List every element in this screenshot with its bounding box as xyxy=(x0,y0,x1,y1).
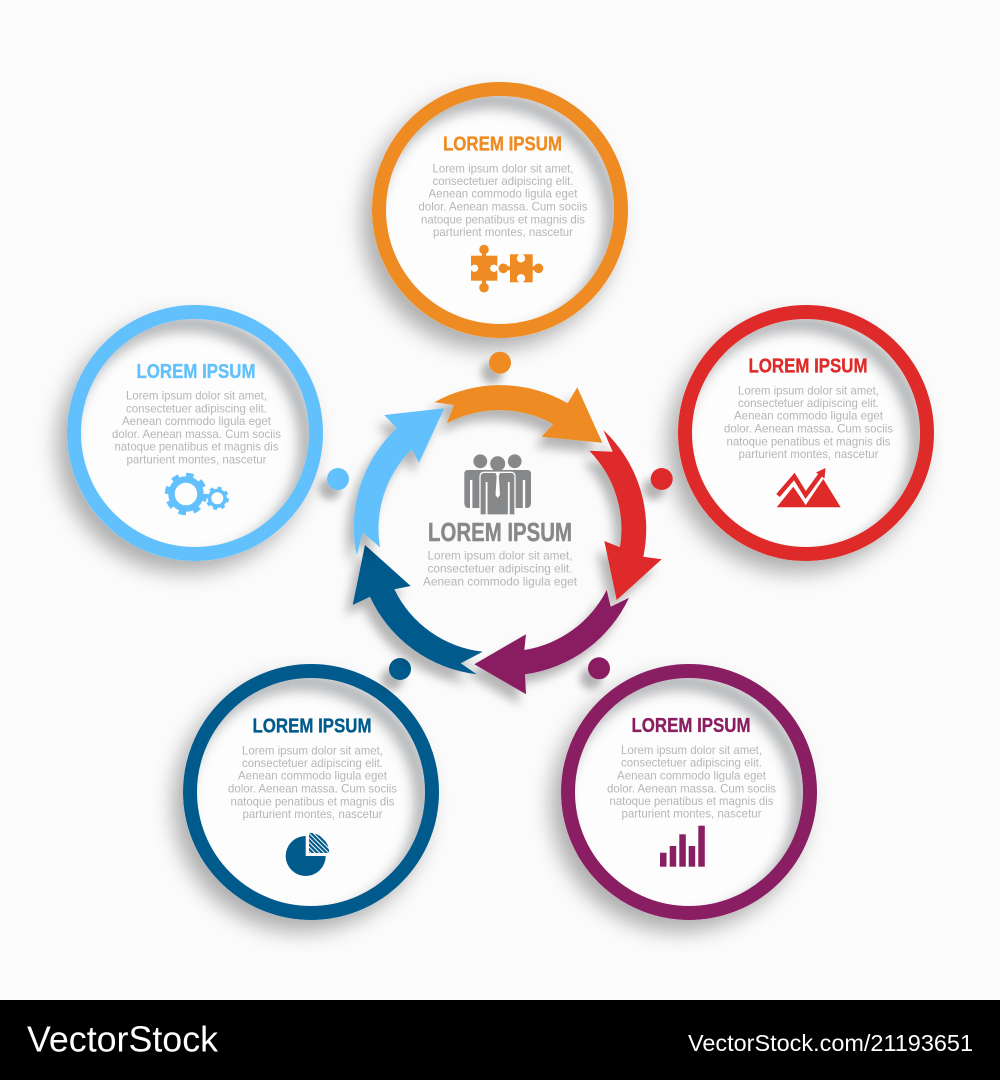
connector dot: dark blue xyxy=(389,658,411,680)
orange body text: Aenean commodo ligula eget xyxy=(428,187,578,201)
red body text xyxy=(724,383,893,461)
connector dot: light blue xyxy=(327,468,349,490)
connector dot: red xyxy=(651,468,673,490)
arrow: orange xyxy=(434,385,602,443)
dark blue body text: consectetuer adipiscing elit. xyxy=(242,756,383,770)
light blue body text xyxy=(112,389,281,466)
red body text: dolor. Aenean massa. Cum sociis xyxy=(724,422,893,436)
purple body text: dolor. Aenean massa. Cum sociis xyxy=(607,781,776,795)
light blue body text: parturient montes, nascetur xyxy=(126,452,266,466)
arrow: red xyxy=(589,430,662,600)
red body text: Lorem ipsum dolor sit amet, xyxy=(738,383,879,397)
orange body text: natoque penatibus et magnis dis xyxy=(421,212,585,226)
arrow: light blue xyxy=(354,408,444,555)
footer logo text: VectorStock xyxy=(27,1018,219,1060)
light blue body text: dolor. Aenean massa. Cum sociis xyxy=(112,427,281,441)
red ring xyxy=(676,305,934,565)
purple ring xyxy=(559,664,817,924)
panel: dark blue circle xyxy=(181,664,439,924)
purple body text: Lorem ipsum dolor sit amet, xyxy=(621,743,762,757)
center body text: consectetuer adipiscing elit. xyxy=(428,562,572,576)
center body text xyxy=(423,548,578,589)
dark blue body text: Lorem ipsum dolor sit amet, xyxy=(242,743,383,757)
orange body text: parturient montes, nascetur xyxy=(433,225,573,239)
light blue body text: Lorem ipsum dolor sit amet, xyxy=(126,389,267,403)
footer bar xyxy=(0,1000,1000,1080)
icon: puzzle pieces xyxy=(470,245,543,293)
connector dot: purple xyxy=(588,657,610,679)
light blue heading: LOREM IPSUM xyxy=(136,361,256,383)
panel: light blue circle xyxy=(65,305,323,565)
orange body text: dolor. Aenean massa. Cum sociis xyxy=(418,200,588,214)
orange ring xyxy=(370,82,628,342)
light blue body text: consectetuer adipiscing elit. xyxy=(126,401,267,415)
dark blue heading: LOREM IPSUM xyxy=(252,716,372,738)
orange body text: Lorem ipsum dolor sit amet, xyxy=(432,161,574,175)
purple body text: consectetuer adipiscing elit. xyxy=(621,756,762,770)
dark blue body text xyxy=(228,743,397,821)
footer image id: VectorStock.com/21193651 xyxy=(688,1030,973,1056)
center heading: LOREM IPSUM xyxy=(428,519,572,547)
dark blue body text: Aenean commodo ligula eget xyxy=(238,769,388,783)
light blue body text: natoque penatibus et magnis dis xyxy=(114,440,278,454)
light blue body text: Aenean commodo ligula eget xyxy=(122,414,272,428)
orange heading: LOREM IPSUM xyxy=(443,134,562,156)
purple body text xyxy=(607,743,776,821)
red body text: Aenean commodo ligula eget xyxy=(734,409,884,423)
red body text: natoque penatibus et magnis dis xyxy=(726,434,890,448)
panel: red circle xyxy=(676,305,934,565)
red body text: consectetuer adipiscing elit. xyxy=(738,396,879,410)
purple body text: natoque penatibus et magnis dis xyxy=(610,794,774,808)
arrow: dark blue xyxy=(353,545,483,674)
icon: bar chart xyxy=(660,826,705,867)
dark blue body text: parturient montes, nascetur xyxy=(242,807,382,821)
light blue ring xyxy=(65,305,323,565)
purple body text: parturient montes, nascetur xyxy=(622,807,762,821)
icon: gears xyxy=(167,475,228,513)
center body text: Lorem ipsum dolor sit amet, xyxy=(428,548,572,562)
dark blue ring xyxy=(181,664,439,924)
center block xyxy=(423,454,578,589)
dark blue body text: dolor. Aenean massa. Cum sociis xyxy=(228,782,397,796)
red heading: LOREM IPSUM xyxy=(748,356,868,378)
orange body text: consectetuer adipiscing elit. xyxy=(432,174,574,188)
purple heading: LOREM IPSUM xyxy=(632,715,750,737)
center body text: Aenean commodo ligula eget xyxy=(423,575,578,589)
orange body text xyxy=(418,161,588,239)
red body text: parturient montes, nascetur xyxy=(738,447,878,461)
purple body text: Aenean commodo ligula eget xyxy=(617,768,767,782)
icon: pie chart xyxy=(286,833,329,876)
connector dot: orange xyxy=(489,352,511,374)
panel: orange circle xyxy=(370,82,628,342)
arrow: purple xyxy=(474,590,629,694)
panel: purple circle xyxy=(559,664,817,924)
dark blue body text: natoque penatibus et magnis dis xyxy=(230,794,394,808)
icon: mountain with rising line xyxy=(775,468,841,507)
icon: group of people xyxy=(464,454,531,515)
